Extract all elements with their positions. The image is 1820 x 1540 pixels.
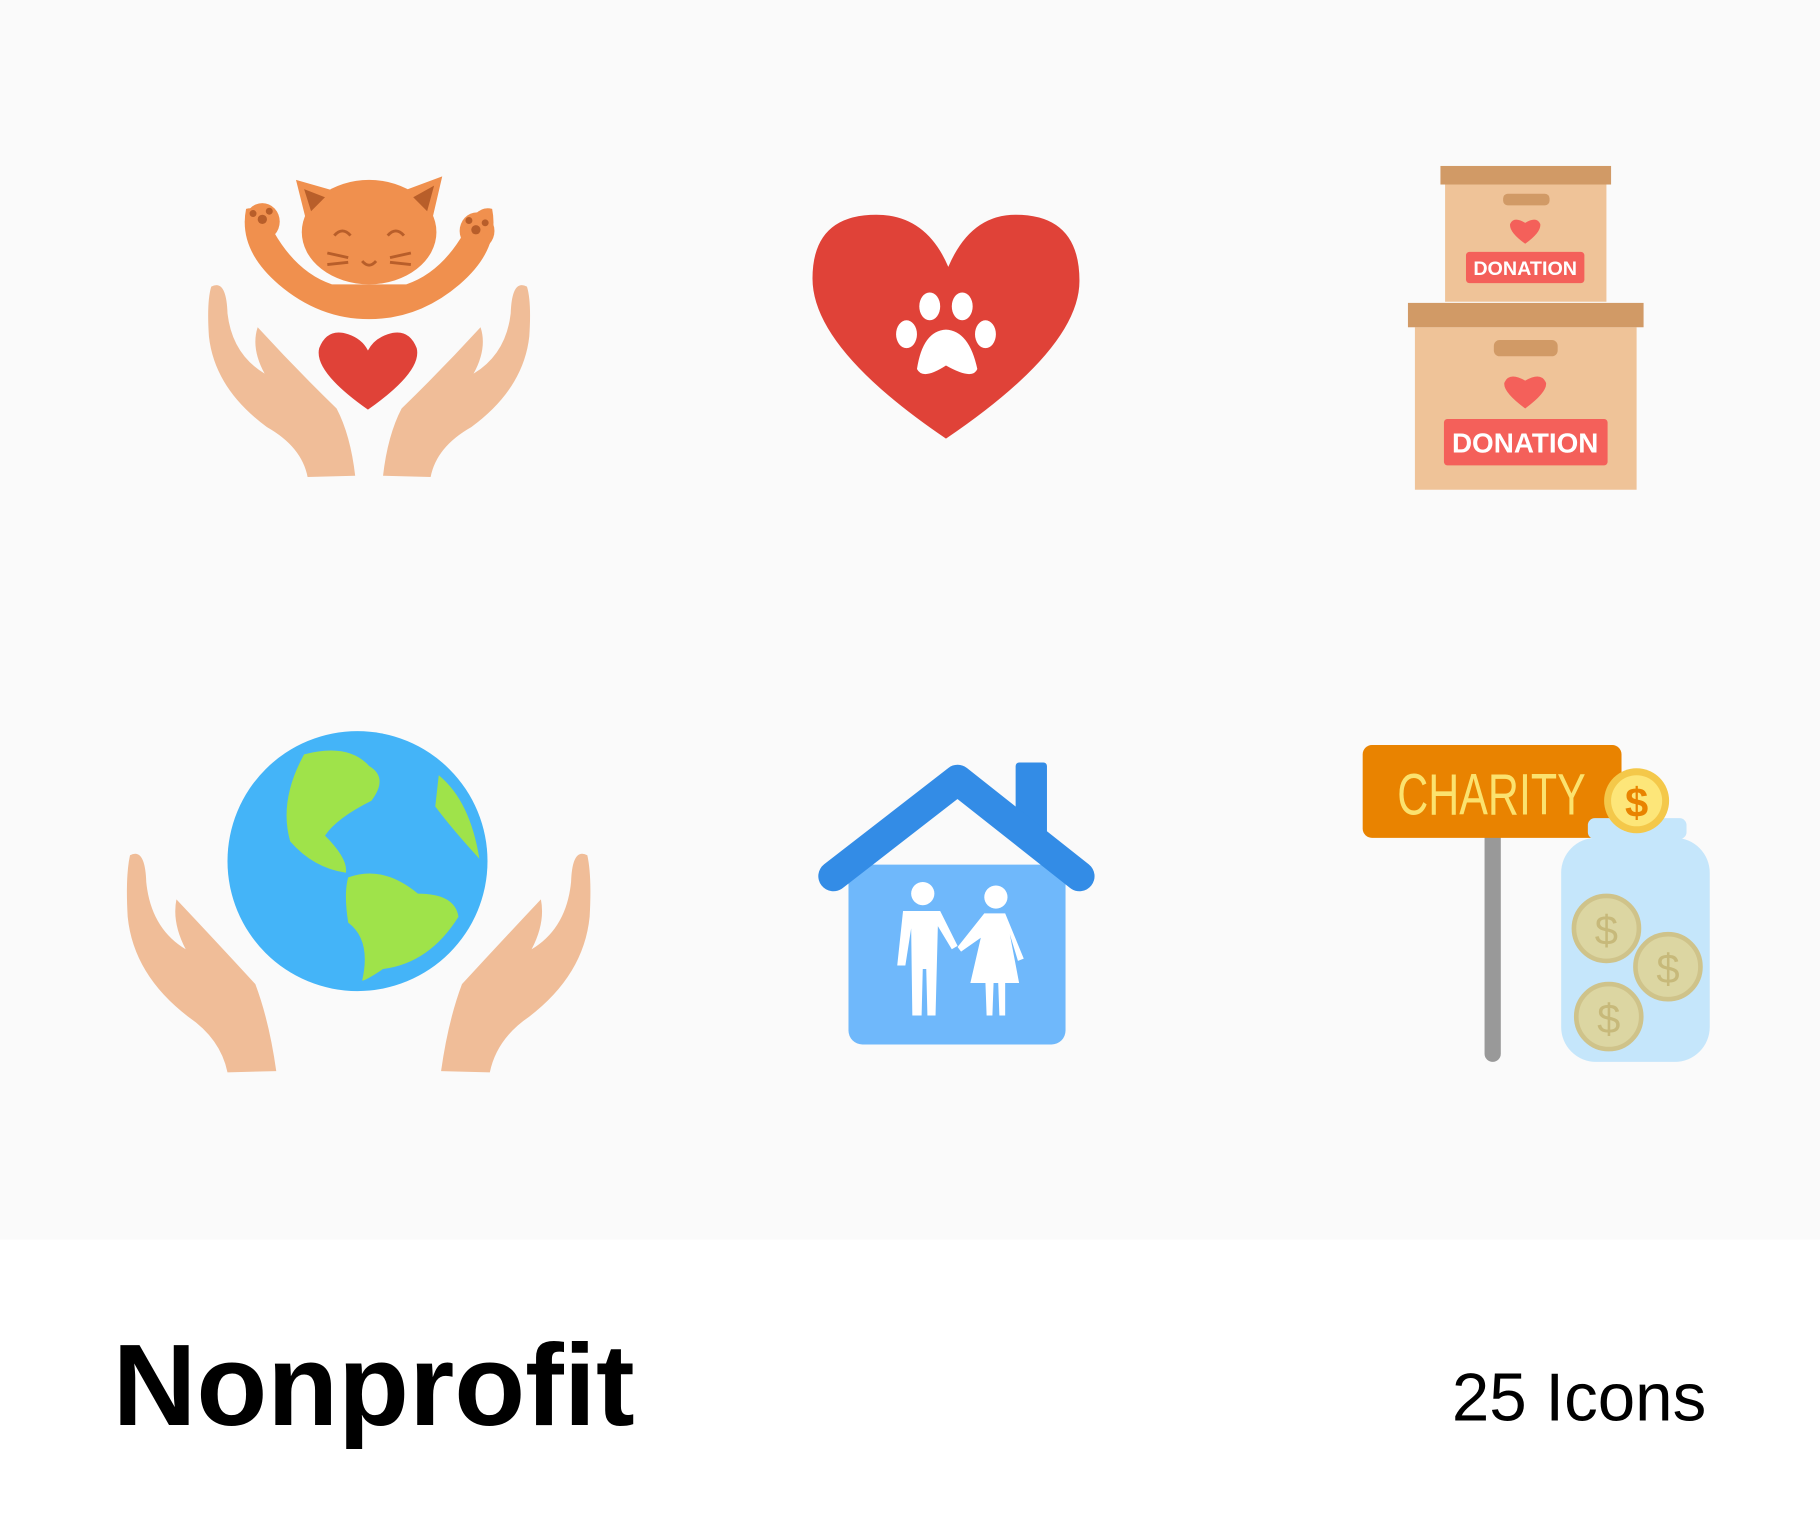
icon: house with family [833, 762, 1079, 1044]
icon: charity sign and coin jar: $ [1625, 779, 1648, 826]
icon: donation boxes: DONATION [1473, 258, 1577, 280]
icon: cat in hands [208, 176, 530, 477]
icon: donation boxes [1408, 166, 1644, 490]
icon: donation boxes: DONATION [1452, 428, 1598, 459]
icon: charity sign and coin jar: $ [1656, 945, 1680, 992]
icon count: 25 Icons [1452, 1360, 1706, 1435]
icon: charity sign and coin jar: CHARITY [1397, 762, 1586, 827]
icon: charity sign and coin jar: $ [1595, 907, 1618, 954]
icon: heart with paw [812, 215, 1079, 439]
title: Nonprofit [113, 1320, 635, 1450]
icon: charity sign and coin jar: $ [1597, 995, 1620, 1042]
icon: charity sign and coin jar [1363, 745, 1710, 1062]
icon: globe in hands [127, 731, 590, 1072]
